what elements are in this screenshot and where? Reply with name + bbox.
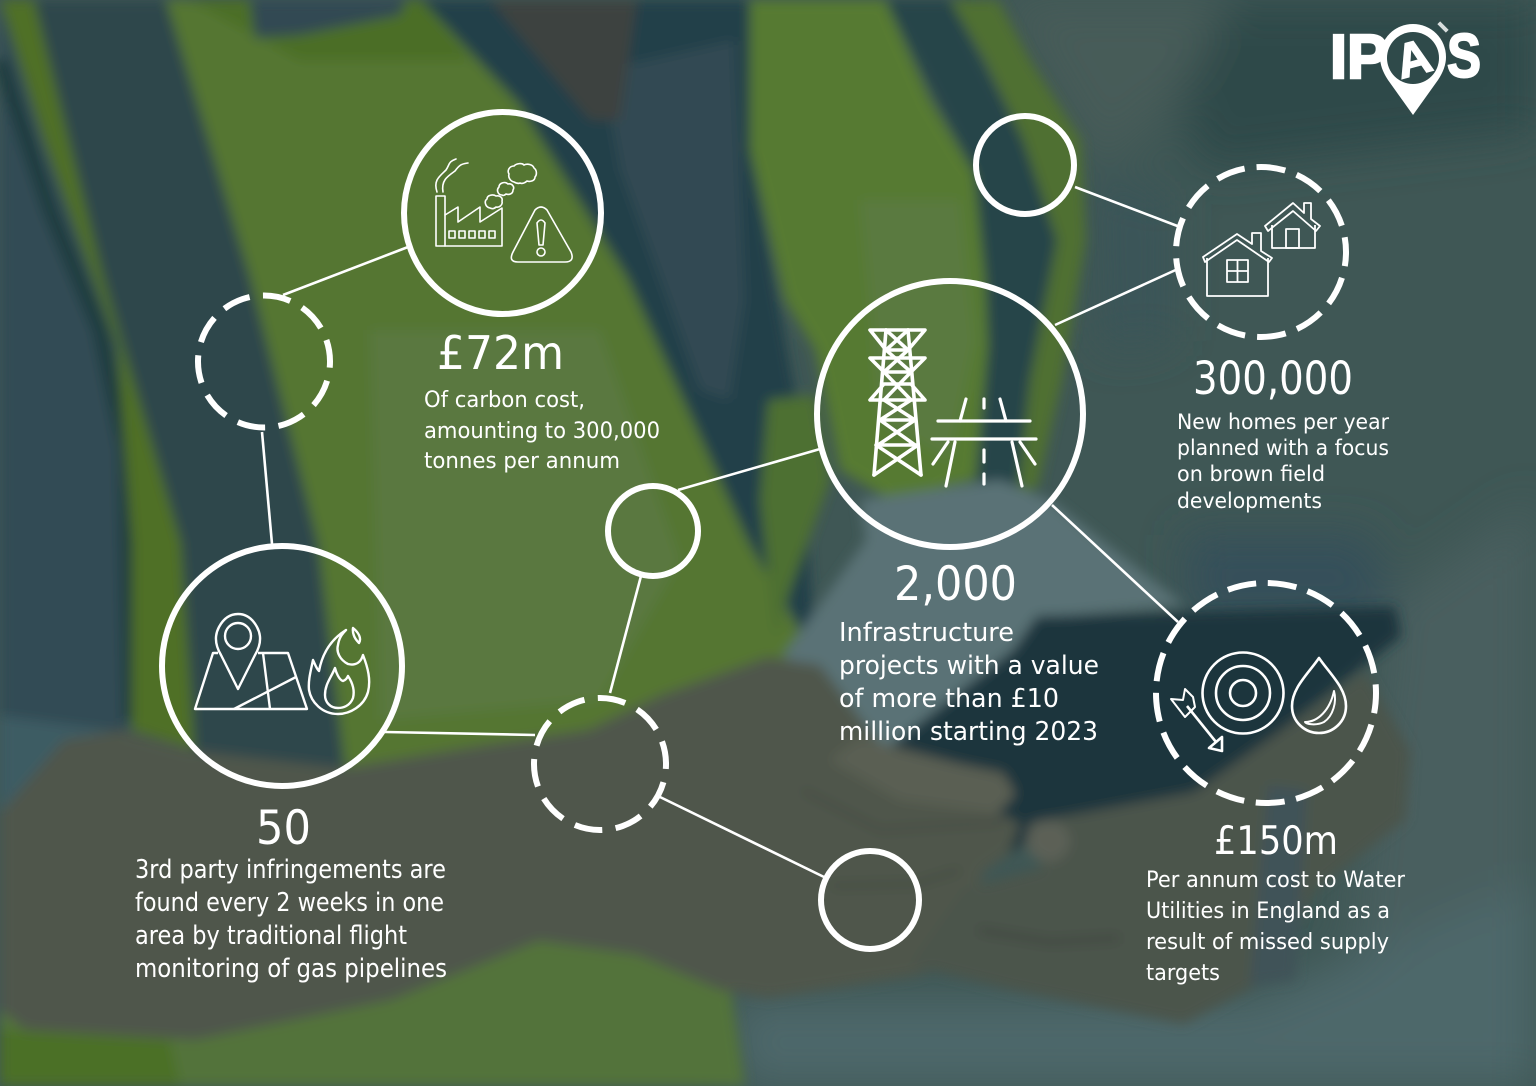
description: on brown field <box>1177 462 1325 486</box>
description <box>424 388 660 474</box>
right dark strap <box>885 0 1057 510</box>
circle: dashed connector node centre <box>515 679 685 849</box>
watch <box>1250 785 1307 985</box>
icon: factory with smoke and warning triangle <box>436 159 572 262</box>
description: Of carbon cost, <box>424 388 585 413</box>
icon: electricity pylon and motorway <box>870 330 1036 486</box>
description: result of missed supply <box>1146 929 1389 955</box>
circle: dashed houses icon frame <box>1163 154 1359 350</box>
description <box>1146 867 1406 986</box>
number: £150m <box>1214 819 1338 864</box>
block: 300,000 stat <box>1177 352 1389 513</box>
circle: dashed connector node left <box>180 278 348 445</box>
number: 300,000 <box>1193 352 1353 405</box>
circle: dashed water icon frame <box>1148 575 1384 811</box>
main green panel <box>166 0 810 770</box>
pylon <box>870 330 925 475</box>
description: area by traditional flight <box>135 921 407 951</box>
paper <box>783 480 1184 755</box>
circle: small node bottom <box>821 851 919 949</box>
outer green strip <box>950 0 1086 490</box>
description: amounting to 300,000 <box>424 419 660 444</box>
description: Per annum cost to Water <box>1146 867 1406 893</box>
description: of more than £10 <box>839 684 1059 714</box>
left strap <box>34 0 345 770</box>
description: projects with a value <box>839 651 1099 681</box>
description: monitoring of gas pipelines <box>135 954 447 984</box>
icon: houses <box>1203 203 1320 296</box>
circle: map icon frame <box>162 546 402 786</box>
description: million starting 2023 <box>839 717 1098 747</box>
description: Utilities in England as a <box>1146 898 1390 924</box>
circle: small node centre <box>608 486 698 576</box>
logo: IPAS <box>1330 21 1481 115</box>
number: 2,000 <box>894 557 1017 612</box>
forearm and left hand <box>0 657 1020 1040</box>
icon: map pin and flame <box>195 614 369 714</box>
number: 50 <box>256 801 311 856</box>
description: Infrastructure <box>839 618 1014 648</box>
tablet <box>885 607 1401 860</box>
left sleeve <box>0 0 132 800</box>
description: targets <box>1146 960 1220 986</box>
block: 2,000 stat <box>839 557 1099 747</box>
description: New homes per year <box>1177 410 1389 434</box>
green below arm <box>0 900 745 1086</box>
description: found every 2 weeks in one <box>135 888 444 918</box>
central dark fold and panel <box>421 0 815 650</box>
motorway <box>932 399 1036 486</box>
description: developments <box>1177 489 1322 513</box>
vest strip left <box>0 0 196 750</box>
block: 50 stat <box>135 801 447 984</box>
icon: target, arrow and water drop <box>1171 652 1346 751</box>
logo: IPAS: IP <box>1330 23 1388 92</box>
connector lines <box>262 187 1180 877</box>
number: £72m <box>437 326 564 380</box>
description: planned with a focus <box>1177 436 1389 460</box>
logo: IPAS: A <box>1390 29 1437 89</box>
circle: factory icon frame <box>404 112 601 314</box>
circle: small node top right <box>976 116 1074 214</box>
right hand <box>910 671 1410 1024</box>
logo: IPAS: S <box>1447 22 1481 91</box>
block: £150m stat <box>1146 819 1406 986</box>
description <box>135 855 447 984</box>
description <box>1177 410 1389 513</box>
description: tonnes per annum <box>424 449 620 474</box>
right green panel <box>750 0 988 500</box>
circle: infrastructure icon frame <box>817 281 1083 547</box>
description: 3rd party infringements are <box>135 855 446 885</box>
description <box>839 618 1099 747</box>
block: £72m stat <box>424 326 660 474</box>
